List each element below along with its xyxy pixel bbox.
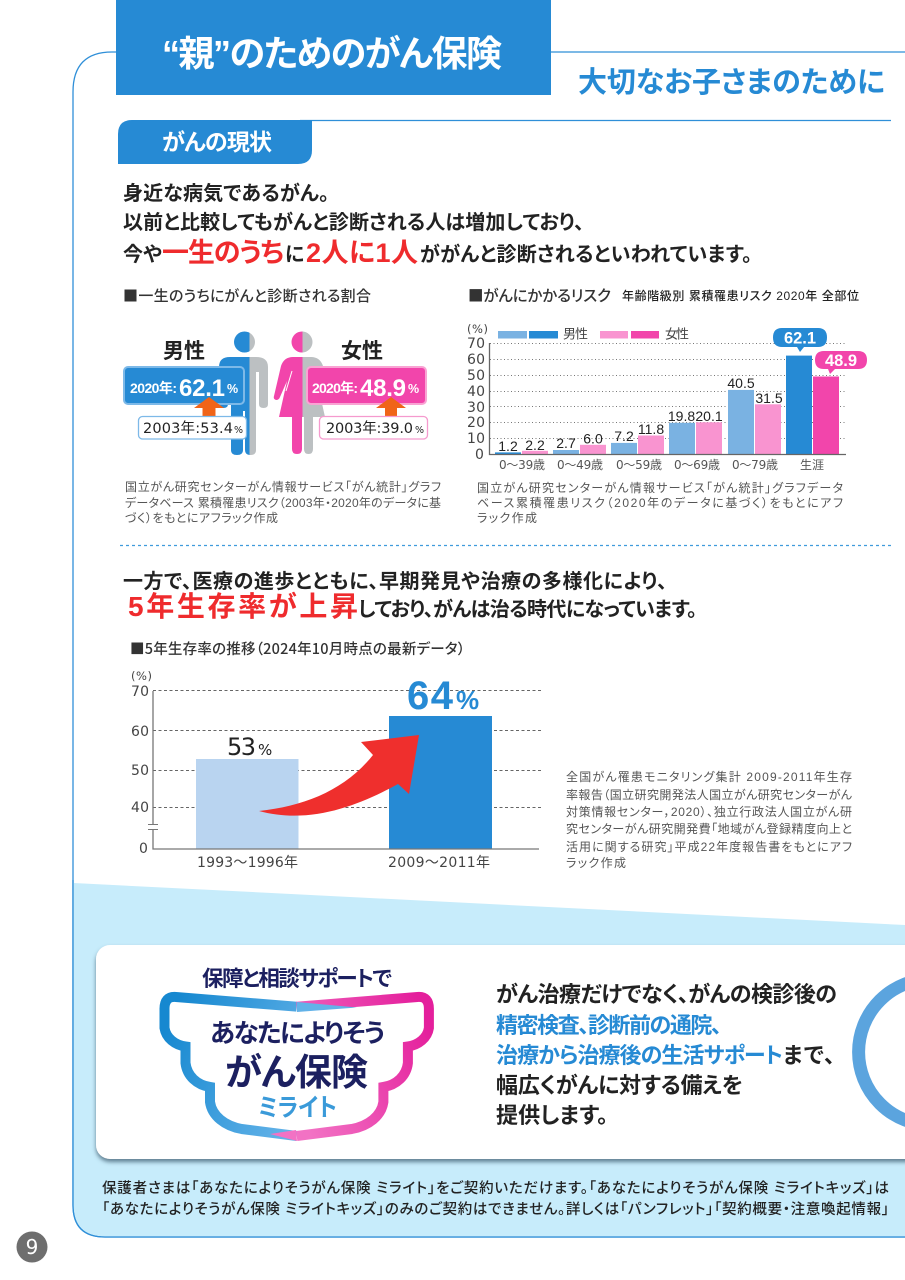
frame lower edge xyxy=(73,880,905,1237)
text: survival rate statement: 一方で、医療の進歩とともに、早期発見や治療の多様化により、 xyxy=(123,570,667,593)
y axis labels: 40 xyxy=(467,384,485,400)
y axis labels: (%) xyxy=(467,322,488,336)
x axis labels: 0～69歳 xyxy=(674,458,720,472)
subtitle: 大切なお子さまのために xyxy=(578,66,885,99)
callout: male lifetime 62.1: 62.1 xyxy=(784,330,816,348)
y axis labels xyxy=(131,669,152,857)
heading: 5-year survival trend: ■5年生存率の推移（2024年10月時点の最新データ） xyxy=(130,638,465,659)
bar value labels: 1.2 xyxy=(498,438,518,454)
card description text: 精密検査、診断前の通院、 xyxy=(496,1013,722,1038)
logo text: がん保険 xyxy=(225,1052,368,1093)
label: female: 女性 xyxy=(341,340,383,363)
source note: survival rate: ラック作成 xyxy=(566,856,626,870)
callout: male 2020 xyxy=(124,367,244,404)
y axis labels: 20 xyxy=(467,415,485,431)
bar value labels: 19.8 xyxy=(668,408,695,424)
grid lines xyxy=(490,344,846,438)
source note: cancer risk: 国立がん研究センターがん情報サービス「がん統計」グラフデータ xyxy=(477,480,843,495)
value label: 53%: % xyxy=(258,741,272,759)
x axis labels: 2009～2011年 xyxy=(388,855,490,871)
intro text: 一生のうち xyxy=(162,238,284,268)
x axis labels xyxy=(197,855,490,871)
bar value labels: 20.1 xyxy=(695,408,723,424)
logo text xyxy=(210,1020,385,1122)
y axis labels: 60 xyxy=(131,724,149,740)
callout: female lifetime 48.9: 48.9 xyxy=(825,352,857,370)
bar value labels: 2.7 xyxy=(556,435,576,451)
intro text: ががんと診断されるといわれています。 xyxy=(420,242,752,266)
callout: male 2020: 62.1 xyxy=(179,375,225,402)
logo: insurance shield xyxy=(164,967,429,1141)
bars xyxy=(495,356,839,454)
source note: cancer risk xyxy=(477,480,843,525)
callout: male 2020: 2020年: xyxy=(130,380,177,396)
source note: cancer risk: ベース累積罹患リスク（2020年のデータに基づく）をもとにアフ xyxy=(477,495,843,510)
callout: female 2020: % xyxy=(408,382,419,396)
axis break xyxy=(148,824,159,830)
title banner xyxy=(116,0,551,95)
callout: female 2003: % xyxy=(415,425,424,436)
bar value labels: 40.5 xyxy=(727,375,755,391)
callout: male 2020: % xyxy=(227,382,238,396)
callout: female 2020: 2020年: xyxy=(312,380,358,396)
card description text: がん治療だけでなく、がんの検診後の xyxy=(496,982,837,1007)
value label: 64%: % xyxy=(456,685,479,715)
grid lines xyxy=(153,690,541,808)
card description text: まで、 xyxy=(783,1043,835,1068)
icon: male figure xyxy=(219,332,268,455)
x axis labels: 0～59歳 xyxy=(616,458,662,472)
x axis labels: 0～79歳 xyxy=(732,458,778,472)
text: survival rate statement: 5年生存率が上昇 xyxy=(128,590,358,622)
heading: cancer risk by age xyxy=(468,284,859,306)
y axis labels: 40 xyxy=(131,800,149,816)
bar: 2009-2011 xyxy=(389,716,492,849)
legend: 男性 xyxy=(563,326,588,342)
logo tagline: 保障と相談サポートで xyxy=(202,967,393,991)
legend: 女性 xyxy=(665,326,689,342)
page number xyxy=(16,1232,48,1262)
source note: survival rate: 究センターがん研究開発費「地域がん登録精度向上と xyxy=(566,821,852,836)
x axis labels: 0～39歳 xyxy=(499,458,545,472)
bar value labels: 11.8 xyxy=(638,421,664,437)
heading: lifetime diagnosis rate: ■一生のうちにがんと診断される割合 xyxy=(123,285,371,306)
source note: lifetime rate: 国立がん研究センターがん情報サービス「がん統計」グラフ xyxy=(125,479,441,494)
source note: cancer risk: ラック作成 xyxy=(477,511,537,525)
footnote text: 保護者さまは「あなたによりそうがん保険 ミライト」をご契約いただけます。「あなたによりそうがん保険 ミライトキッズ」は xyxy=(102,1179,889,1197)
bar value labels xyxy=(498,375,783,454)
source note: lifetime rate: データベース 累積罹患リスク（2003年・2020年のデータに基 xyxy=(125,495,441,510)
callout: female 2003 xyxy=(320,416,428,439)
intro text: 以前と比較してもがんと診断される人は増加しており、 xyxy=(123,210,584,234)
x axis labels xyxy=(499,458,824,472)
icon: female figure xyxy=(274,332,325,454)
value label: 53% xyxy=(227,733,272,761)
source note: lifetime rate xyxy=(125,479,441,525)
axes xyxy=(153,691,539,849)
y axis labels: 10 xyxy=(467,431,485,447)
source note: survival rate: 活用に関する研究」平成22年度報告書をもとにアフ xyxy=(566,840,852,854)
source note: lifetime rate: づく）をもとにアフラック作成 xyxy=(125,511,278,525)
panel: light blue background xyxy=(74,883,905,1236)
card description text: 提供します。 xyxy=(496,1103,608,1128)
pictogram chart: lifetime rate xyxy=(124,332,428,455)
callout: male 2003: % xyxy=(234,425,243,436)
y axis labels: (%) xyxy=(131,669,152,683)
source note: survival rate: 全国がん罹患モニタリング集計 2009-2011年生存 xyxy=(566,769,852,784)
source note: survival rate: 率報告（国立研究開発法人国立がん研究センターがん xyxy=(566,787,852,802)
arrow: female increase xyxy=(376,397,406,420)
callout: male 2003: 2003年:53.4 xyxy=(143,420,233,437)
callout: female 2020: 48.9 xyxy=(360,375,406,402)
heading: cancer risk by age: ■がんにかかるリスク xyxy=(468,284,611,306)
bar value labels: 31.5 xyxy=(755,390,783,406)
card description text: 治療から治療後の生活サポート xyxy=(496,1043,783,1068)
value label: 64%: 64 xyxy=(407,674,454,718)
bar chart: cumulative risk by age xyxy=(467,322,867,472)
logo text: あなたによりそう xyxy=(210,1020,385,1048)
value label: 64% xyxy=(407,674,479,718)
bar value labels: 7.2 xyxy=(614,428,634,444)
title banner: “親”のためのがん保険 xyxy=(162,33,502,74)
y axis labels: 50 xyxy=(467,368,485,384)
card description text xyxy=(496,982,837,1128)
intro text: 身近な病気であるがん。 xyxy=(123,181,329,205)
axes xyxy=(490,343,846,454)
y axis labels: 70 xyxy=(467,336,485,352)
text: survival rate statement: しており、がんは治る時代になっています。 xyxy=(358,597,697,621)
y axis labels xyxy=(467,322,488,463)
callout: male 2003 xyxy=(138,416,246,439)
y axis labels: 30 xyxy=(467,400,485,416)
callout: female 2020 xyxy=(307,367,426,404)
arrow: increase xyxy=(259,735,419,816)
section tab: current state of cancer xyxy=(118,120,891,164)
panel: product card xyxy=(96,945,905,1159)
y axis labels: 0 xyxy=(139,841,148,857)
footnote text: 「あなたによりそうがん保険 ミライトキッズ」のみのご契約はできません。詳しくは「パンフレット」「契約概要・注意喚起情報」 xyxy=(102,1200,889,1218)
label: male: 男性 xyxy=(163,340,205,363)
source note: survival rate xyxy=(566,769,852,870)
callout: male lifetime 62.1 xyxy=(773,328,827,352)
card description text: 幅広くがんに対する備えを xyxy=(496,1073,743,1098)
section tab: current state of cancer: がんの現状 xyxy=(162,129,272,155)
logo shield outline xyxy=(164,997,429,1141)
heading: cancer risk by age: 年齢階級別 累積罹患リスク 2020年 全部位 xyxy=(622,288,859,303)
y axis labels: 60 xyxy=(467,352,485,368)
page number: 9 xyxy=(26,1235,38,1259)
bar chart: 5-year survival rate xyxy=(131,669,541,871)
arrow: male increase xyxy=(194,397,224,420)
callout: female lifetime 48.9 xyxy=(815,351,867,374)
x axis labels: 0～49歳 xyxy=(557,458,603,472)
source note: survival rate: 対策情報センター，2020）、独立行政法人国立がん研 xyxy=(566,804,852,819)
bar value labels: 6.0 xyxy=(583,430,603,446)
intro text: 今や xyxy=(123,243,162,266)
intro text: に xyxy=(285,244,304,266)
legend xyxy=(498,326,689,342)
text: survival rate statement xyxy=(123,570,697,622)
bar value labels: 2.2 xyxy=(525,437,545,453)
bar: 1993-1996 xyxy=(196,759,298,849)
footnote text xyxy=(102,1179,889,1218)
callout: female 2003: 2003年:39.0 xyxy=(326,420,413,437)
intro text: 2人に1人 xyxy=(306,238,418,268)
logo text: ミライト xyxy=(258,1094,337,1122)
value label: 53%: 53 xyxy=(227,733,256,761)
y axis labels: 70 xyxy=(131,684,149,700)
x axis labels: 生涯 xyxy=(800,458,824,472)
y axis labels: 50 xyxy=(131,763,149,779)
y axis labels: 0 xyxy=(475,447,484,463)
x axis labels: 1993～1996年 xyxy=(197,855,298,871)
intro text xyxy=(123,181,752,268)
decorative ring xyxy=(859,979,905,1125)
